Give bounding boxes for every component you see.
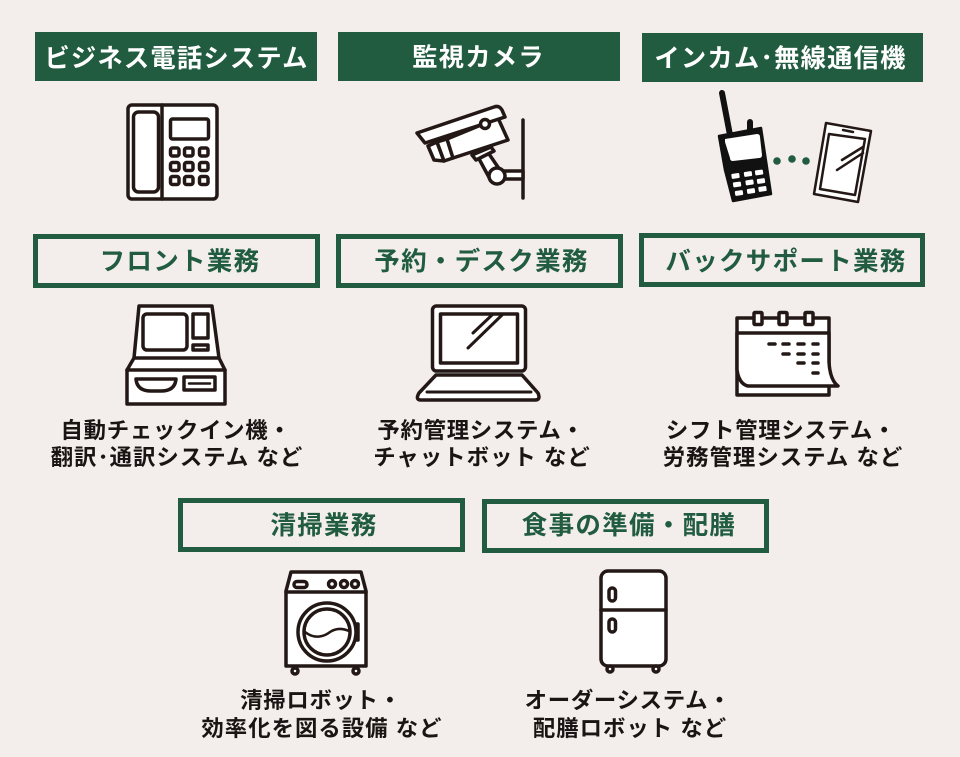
- icon: tablet: [814, 123, 871, 202]
- text: バックサポート業務 examples: シフト管理システム・: [666, 418, 896, 443]
- heading box: 食事の準備・配膳: [484, 502, 766, 550]
- heading: インカム・無線通信機: インカム･無線通信機: [654, 45, 907, 73]
- icon: walkie-talkie and tablet: [719, 93, 871, 202]
- text: フロント業務 examples: 自動チェックイン機・: [61, 418, 291, 443]
- heading: インカム・無線通信機: [642, 33, 923, 82]
- text: 食事の準備・配膳 examples: [525, 687, 731, 741]
- icon: connection dots: [773, 155, 810, 165]
- heading box: 予約・デスク業務: [338, 236, 620, 286]
- text: 食事の準備・配膳 examples: 配膳ロボット など: [533, 716, 727, 741]
- icon: washing machine: [286, 572, 366, 674]
- icon: walkie-talkie: [719, 93, 771, 201]
- heading box: バックサポート業務: [642, 236, 922, 284]
- heading: 監視カメラ: [338, 32, 620, 81]
- heading box: フロント業務: [36, 236, 318, 286]
- text: 予約・デスク業務 examples: チャットボット など: [373, 445, 591, 470]
- heading box: 食事の準備・配膳: 食事の準備・配膳: [522, 512, 736, 540]
- heading: 監視カメラ: 監視カメラ: [412, 44, 545, 72]
- text: 予約・デスク業務 examples: 予約管理システム・: [377, 418, 585, 443]
- text: フロント業務 examples: 翻訳･通訳システム など: [51, 445, 303, 470]
- icon: calendar: [737, 312, 838, 395]
- icon: security camera: [417, 106, 523, 198]
- heading: ビジネス電話システム: [35, 32, 317, 81]
- text: バックサポート業務 examples: 労務管理システム など: [663, 445, 903, 470]
- text: 清掃業務 examples: 効率化を図る設備 など: [201, 716, 443, 741]
- heading box: 清掃業務: 清掃業務: [270, 512, 378, 540]
- icon: business phone: [128, 105, 217, 199]
- heading box: フロント業務: フロント業務: [100, 248, 260, 276]
- icon: laptop: [417, 306, 539, 400]
- heading box: 清掃業務: [180, 500, 462, 550]
- heading: ビジネス電話システム: ビジネス電話システム: [44, 45, 309, 73]
- text: フロント業務 examples: [51, 418, 303, 470]
- text: 予約・デスク業務 examples: [373, 418, 591, 470]
- text: 清掃業務 examples: [201, 688, 443, 741]
- text: バックサポート業務 examples: [663, 418, 903, 470]
- heading box: バックサポート業務: バックサポート業務: [665, 248, 907, 276]
- icon: check-in kiosk: [127, 306, 225, 404]
- text: 食事の準備・配膳 examples: オーダーシステム・: [525, 687, 731, 713]
- text: 清掃業務 examples: 清掃ロボット・: [240, 688, 402, 713]
- icon: refrigerator: [601, 571, 666, 672]
- heading box: 予約・デスク業務: 予約・デスク業務: [374, 247, 589, 276]
